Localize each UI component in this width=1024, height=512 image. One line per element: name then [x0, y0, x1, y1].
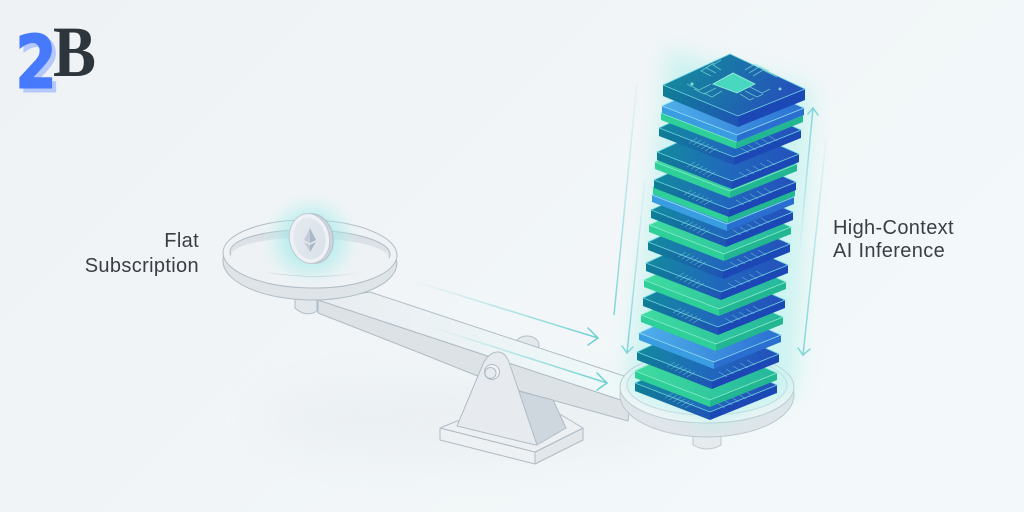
- arrow: beam lower: [425, 325, 607, 390]
- label: Flat Subscription: Subscription: [85, 255, 199, 277]
- arrow: left down: [622, 180, 645, 353]
- fulcrum support: [440, 352, 583, 464]
- front plate of upright: [457, 352, 537, 445]
- logo: 2B: 2: [19, 24, 61, 110]
- icon: ethereum diamond: [304, 228, 316, 252]
- label: High-Context AI Inference: High-Context: [833, 217, 954, 239]
- side of upright: [518, 391, 566, 445]
- seesaw beam: [318, 292, 630, 421]
- label: High-Context AI Inference: AI Inference: [833, 240, 945, 262]
- dish rim: [620, 351, 794, 437]
- top chip layer: [663, 54, 805, 127]
- dish post: [693, 432, 721, 449]
- logo: 2B: 2: [15, 20, 57, 106]
- ground shadow: [260, 380, 680, 460]
- arrow: right up: [800, 108, 818, 247]
- dish post: [295, 297, 317, 314]
- label: Flat Subscription: [85, 230, 199, 277]
- center processor: [713, 73, 755, 93]
- arrow: right down: [798, 140, 826, 355]
- right dish: [620, 351, 794, 449]
- GPU / chip stack: [635, 54, 805, 420]
- label: Flat Subscription: Flat: [164, 230, 199, 252]
- arrow: left long line: [614, 83, 637, 315]
- pivot pin: [484, 364, 500, 380]
- stack glow: [626, 50, 812, 428]
- circuit traces: [687, 60, 777, 100]
- fulcrum back pin: [515, 336, 539, 354]
- coin with glow: [261, 192, 361, 288]
- logo: 2B: [15, 12, 96, 110]
- arrow: beam upper: [410, 280, 598, 345]
- left dish: [222, 218, 398, 314]
- dish rim: [222, 218, 398, 302]
- base slab: [440, 410, 583, 464]
- logo: 2B: B: [53, 12, 96, 92]
- label: High-Context AI Inference: [833, 217, 954, 262]
